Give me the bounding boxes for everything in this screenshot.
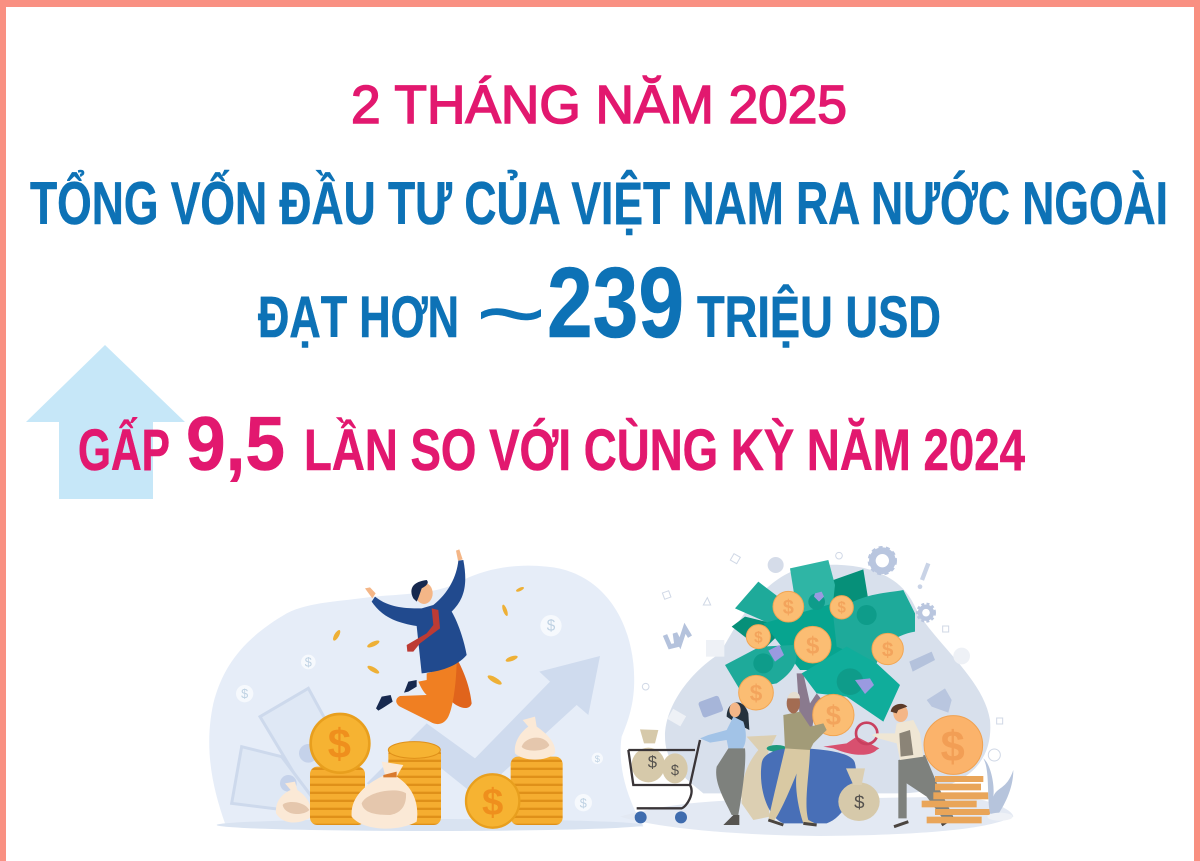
decorative icons <box>642 547 1003 761</box>
tree coins: $ <box>882 639 894 662</box>
coin stack left <box>310 714 369 825</box>
tree trunk <box>797 673 825 747</box>
tree coins <box>739 591 903 736</box>
banknotes <box>232 688 360 813</box>
shopping cart with money bags <box>628 729 700 823</box>
tree foliage of banknotes <box>725 560 915 722</box>
small money bag <box>276 782 312 823</box>
tree coins: $ <box>826 700 841 731</box>
up arrow background <box>26 345 185 499</box>
headline value: ~ <box>476 263 546 365</box>
ground shadow <box>217 819 643 831</box>
headline value: TRIỆU USD <box>697 285 941 350</box>
blue pot <box>761 745 856 823</box>
floating dollar tokens <box>236 615 603 811</box>
small tan sack: $ <box>854 791 865 812</box>
man pushing coin <box>872 704 953 827</box>
coin stack left: $ <box>328 720 351 767</box>
tree coins: $ <box>806 632 819 659</box>
flying coins <box>332 586 525 686</box>
small tan sack <box>838 768 880 821</box>
headline value: 239 <box>547 247 684 359</box>
gemstones <box>768 592 874 694</box>
ground and background blob <box>620 565 1013 836</box>
growth comparison: 9,5 <box>186 402 285 487</box>
growth arrow <box>367 656 600 797</box>
floating dollar tokens: $ <box>241 687 248 701</box>
jumping man <box>365 549 472 724</box>
background blob <box>209 566 643 827</box>
plant <box>983 758 1013 821</box>
shopping cart with money bags: $ <box>671 763 679 779</box>
old man with coin <box>768 692 827 825</box>
tree coins: $ <box>754 629 763 646</box>
growth comparison <box>78 402 1025 487</box>
growth comparison: GẤP <box>78 418 170 483</box>
woman with cart <box>700 702 749 825</box>
illustration: money tree and team <box>620 547 1013 836</box>
headline value: ĐẠT HƠN <box>258 285 459 350</box>
coin stack right <box>466 717 563 828</box>
large money bag <box>352 762 417 829</box>
floating dollar tokens: $ <box>305 655 312 669</box>
floating dollar tokens: $ <box>580 796 587 810</box>
tree coins: $ <box>750 680 763 706</box>
tree coins: $ <box>837 600 846 617</box>
coin stack middle <box>388 742 441 825</box>
illustration: jumping investor with coins <box>209 549 643 831</box>
floating dollar tokens: $ <box>547 618 556 635</box>
large tan sack <box>741 735 777 820</box>
tree coins: $ <box>783 597 794 619</box>
title line 1: 2 THÁNG NĂM 2025 <box>351 75 847 135</box>
shopping cart with money bags: $ <box>648 752 657 771</box>
big coin and coin pile: $ <box>941 724 965 772</box>
coin stack right: $ <box>482 781 503 824</box>
floating dollar tokens: $ <box>595 754 601 764</box>
watering can <box>823 723 879 755</box>
headline value <box>258 247 941 365</box>
big coin and coin pile <box>922 716 990 823</box>
growth comparison: LẦN SO VỚI CÙNG KỲ NĂM 2024 <box>304 418 1025 483</box>
